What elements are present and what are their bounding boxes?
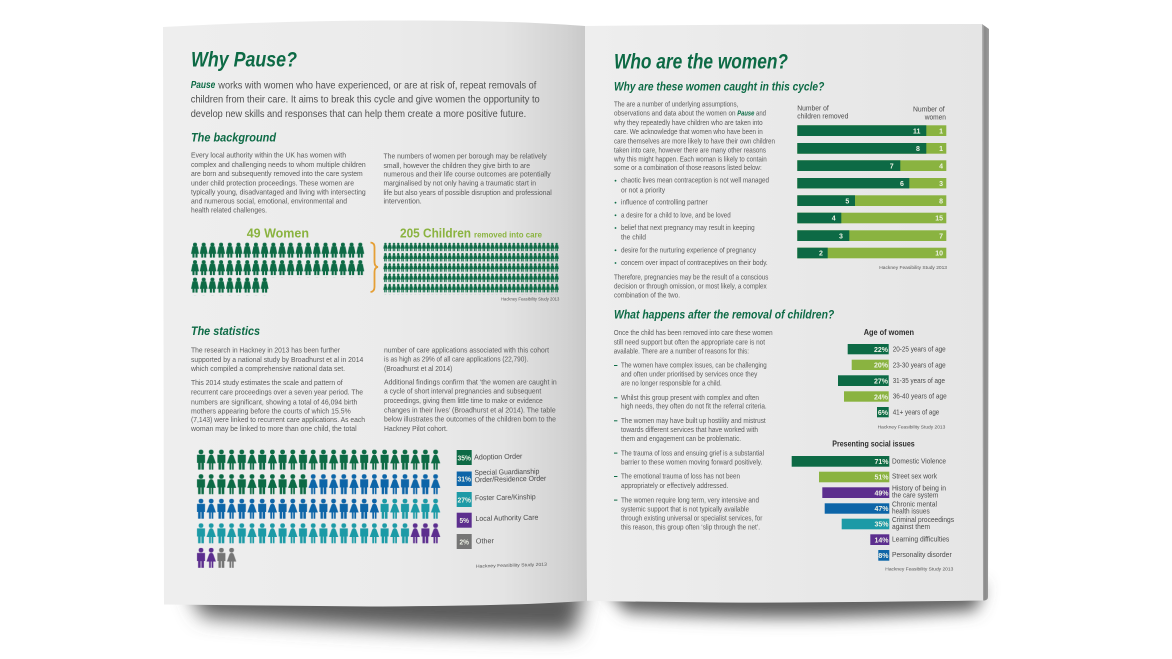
bar chart: presenting social issues: Learning difficulties <box>892 535 950 544</box>
bullet list: reasons: the child <box>621 234 646 241</box>
pictogram: 49 women <box>191 243 365 295</box>
label: 205 Children removed into care: 205 Children <box>400 225 471 240</box>
label: 49 Women: 49 Women <box>247 225 309 240</box>
dash list: reasons for lack of care: this reason, this group often ‘slip through the net’. <box>621 525 760 532</box>
intro paragraph: children from their care. It aims to break this cycle and give women the opportunity to <box>191 95 540 106</box>
text block: background left column: complex and challenging needs to whom multiple children <box>191 162 366 169</box>
bar chart: children removed vs number of women: 11 <box>913 128 921 135</box>
bar chart: age of women: 31-35 years of age <box>893 376 945 385</box>
bullet list: reasons: concern over impact of contraceptives on their body. <box>621 260 768 267</box>
text block: statistics left column: recurrent care proceedings over a seven year period. The <box>191 390 363 397</box>
bar chart: age of women: 36-40 years of age <box>893 392 947 401</box>
panel: left page <box>163 20 587 606</box>
bullet list: reasons: or not a priority <box>621 187 666 194</box>
bar chart: children removed vs number of women: 7 <box>939 233 943 240</box>
bar chart: presenting social issues: 14% <box>874 537 889 544</box>
bar chart: children removed vs number of women: 3 <box>839 233 843 240</box>
label: 205 Children removed into care <box>400 225 543 240</box>
text block: background right column: The numbers of women per borough may be relatively <box>384 154 547 161</box>
text block: background left column <box>191 153 366 215</box>
legend: outcomes: 27% <box>458 497 472 504</box>
text block: underlying assumptions: some or a combination of those reasons listed below: <box>614 165 762 172</box>
bar chart: age of women: 20% <box>874 363 889 370</box>
dash list: reasons for lack of care: The women require long term, very intensive and <box>621 497 759 504</box>
bar chart: children removed vs number of women: 1 <box>939 128 943 135</box>
heading: Age of women: Age of women <box>864 327 914 337</box>
text block: statistics right column: is as high as 29% of all care applications (22,790). <box>384 357 528 364</box>
bar chart: presenting social issues: 49% <box>874 490 889 497</box>
bar chart: children removed vs number of women: 7 <box>890 163 894 170</box>
dash list: reasons for lack of care: are no longer responsible for a child. <box>621 380 722 387</box>
dash list: reasons for lack of care: The women may have built up hostility and mistrust <box>621 418 766 425</box>
bar chart: presenting social issues: 35% <box>874 522 889 529</box>
bar chart: presenting social issues: Personality disorder <box>892 550 952 559</box>
intro paragraph: Pause <box>191 80 216 91</box>
text block: conclusion: combination of the two. <box>614 293 680 300</box>
legend: outcomes: Other <box>476 536 495 545</box>
text block: statistics left column: The research in Hackney in 2013 has been further <box>191 348 341 355</box>
dash list: reasons for lack of care: The women have complex issues, can be challenging <box>621 363 767 370</box>
bar chart: children removed vs number of women: 6 <box>900 181 904 188</box>
text block: underlying assumptions: observations and data about the women on <box>614 111 736 118</box>
bar chart: presenting social issues: History of being in <box>892 484 946 493</box>
text block: statistics left column: This 2014 study estimates the scale and pattern of <box>191 380 343 387</box>
heading: The statistics: The statistics <box>191 324 260 338</box>
text block: statistics right column: (Broadhurst et al 2014) <box>384 366 452 373</box>
left page content <box>190 48 560 569</box>
text block: background left column: Every local authority within the UK has women with <box>191 153 346 160</box>
heading: What happens after the removal of children?: What happens after the removal of children? <box>614 307 835 321</box>
bullet list: reasons: chaotic lives mean contraception is not well managed <box>621 178 769 185</box>
bar chart: children removed vs number of women: Number of <box>797 104 830 113</box>
bar chart: children removed vs number of women <box>797 104 946 258</box>
dash list: reasons for lack of care: barrier to these women moving forward positively. <box>621 459 762 466</box>
bar chart: children removed vs number of women: Number of <box>913 105 946 114</box>
text block: background left column: typically young, disadvantaged and living with intersecting <box>191 190 366 197</box>
right page content <box>613 50 954 572</box>
page drop shadows <box>188 585 984 634</box>
bar chart: children removed vs number of women: 10 <box>935 251 943 258</box>
bar chart: presenting social issues: Chronic mental <box>892 499 937 508</box>
text block: underlying assumptions: care. We acknowledge that women who have been in <box>614 129 763 136</box>
bar chart: age of women: 20-25 years of age <box>893 345 946 354</box>
bar chart: presenting social issues: health issues <box>892 506 930 515</box>
text block: underlying assumptions: and <box>756 111 766 118</box>
bar chart: children removed vs number of women: 8 <box>916 146 920 153</box>
bar chart: presenting social issues: 71% <box>874 459 889 466</box>
text block: conclusion <box>614 274 769 300</box>
text block: statistics right column: number of care applications associated with this cohort <box>384 347 549 354</box>
bar chart: age of women: 6% <box>878 410 889 417</box>
intro paragraph <box>191 80 540 120</box>
bar chart: children removed vs number of women: women <box>924 112 946 121</box>
bar chart: age of women <box>838 344 947 417</box>
bar chart: children removed vs number of women: 3 <box>939 181 943 188</box>
legend: outcomes: 31% <box>458 476 472 483</box>
text block: statistics left column: (7,143) were linked to recurrent care applications. As each <box>191 417 365 424</box>
legend: outcomes <box>457 450 548 549</box>
bar chart: children removed vs number of women: 15 <box>935 216 943 223</box>
text block: background right column: marginalised by not only having a traumatic start in <box>384 181 536 188</box>
icon: orange bracket <box>370 242 378 292</box>
intro paragraph: works with women who have experienced, or are at risk of, repeat removals of <box>217 80 537 91</box>
text block: statistics right column <box>384 347 557 433</box>
dash list: reasons for lack of care: The trauma of loss and ensuing grief is a substantial <box>621 450 764 457</box>
text block: underlying assumptions: why they repeatedly have children who are taken into <box>613 120 763 127</box>
bar chart: presenting social issues: against them <box>892 522 930 531</box>
text block: statistics right column: Additional findings confirm that ‘the women are caught in <box>384 379 557 386</box>
text block: background right column: intervention. <box>384 199 422 206</box>
legend: outcomes: 35% <box>458 455 472 462</box>
bar chart: presenting social issues: Domestic Violence <box>892 456 946 465</box>
text block: statistics right column: proceedings, giving them little time to make or evidence <box>384 398 543 405</box>
legend: outcomes: Local Authority Care <box>475 513 538 523</box>
bar chart: presenting social issues: the care system <box>892 491 938 500</box>
dash list: reasons for lack of care <box>614 363 767 532</box>
bullet list: reasons: desire for the nurturing experience of pregnancy <box>621 247 756 254</box>
bar chart: presenting social issues: 8% <box>878 553 889 560</box>
text block: statistics left column: numbers are significant, showing a total of 46,094 birth <box>191 399 357 406</box>
bar chart: children removed vs number of women: 8 <box>939 198 943 205</box>
bar chart: age of women: 24% <box>874 394 889 401</box>
text block: removal intro: available. There are a number of reasons for this: <box>614 348 749 355</box>
text block: underlying assumptions: why this might happen. Each woman is likely to contain <box>613 156 767 163</box>
text block: underlying assumptions: The are a number of underlying assumptions, <box>614 102 738 109</box>
title: Why Pause?: Why Pause? <box>191 48 297 72</box>
text block: statistics left column <box>190 348 365 433</box>
text block: statistics right column: Hackney Pilot cohort. <box>384 426 448 433</box>
dash list: reasons for lack of care: Whilst this group present with complex and often <box>621 395 759 402</box>
bar chart: children removed vs number of women: 4 <box>939 163 943 170</box>
label: 205 Children removed into care: removed into care <box>474 230 543 239</box>
bar chart: presenting social issues: 51% <box>874 475 889 482</box>
text block: background right column: life but also years of possible disruption and professional <box>384 190 552 197</box>
bar chart: children removed vs number of women: 2 <box>819 251 823 258</box>
legend: outcomes: 2% <box>460 539 470 546</box>
legend: outcomes: Foster Care/Kinship <box>475 492 536 502</box>
text block: removal intro: Once the child has been removed into care these women <box>614 330 773 337</box>
source note: Hackney Feasibility Study 2013 <box>885 567 954 572</box>
text block: background right column <box>384 154 552 206</box>
pictogram: outcomes for 100 children <box>196 450 441 569</box>
text block: conclusion: Therefore, pregnancies may be the result of a conscious <box>614 274 769 281</box>
text block: removal intro <box>614 330 773 355</box>
heading: Presenting social issues: Presenting social issues <box>832 439 915 449</box>
source note: Hackney Feasibility Study 2013 <box>501 297 560 302</box>
text block: statistics left column: which compiled a comprehensive national data set. <box>190 366 345 373</box>
source note: Hackney Feasibility Study 2013 <box>878 424 946 429</box>
text block: background right column: numerous and their life course outcomes are potentially <box>384 172 551 179</box>
dash list: reasons for lack of care: and often under prioritised by services once they <box>621 371 758 378</box>
bar chart: age of women: 41+ years of age <box>893 407 939 416</box>
pictogram: 205 children <box>383 243 559 294</box>
text block: background left column: and numerous social, emotional, environmental and <box>191 198 347 205</box>
text block: background right column: small, however the children they give birth to are <box>384 163 530 170</box>
legend: outcomes: Special Guardianship <box>474 467 540 477</box>
text block: background left column: health related challenges. <box>191 208 267 215</box>
heading: The background: The background <box>191 131 276 145</box>
text block: background left column: are born and subsequently removed into the care system <box>191 171 363 178</box>
bullet list: reasons: a desire for a child to love, and be loved <box>621 212 731 219</box>
dash list: reasons for lack of care: systemic support that is not typically available <box>621 507 749 514</box>
bar chart: presenting social issues: 47% <box>874 506 889 513</box>
text block: statistics left column: mothers appearing before the courts of which 15.5% <box>191 408 351 415</box>
bar chart: presenting social issues: Street sex work <box>892 472 937 481</box>
legend: outcomes: Order/Residence Order <box>474 474 547 484</box>
bar chart: children removed vs number of women: 5 <box>845 198 849 205</box>
bullet list: reasons: belief that next pregnancy may result in keeping <box>621 225 755 232</box>
source note: Hackney Feasibility Study 2013 <box>879 265 948 270</box>
text block: underlying assumptions: Pause <box>737 111 754 118</box>
legend: outcomes: 5% <box>460 518 470 525</box>
bullet list: reasons: influence of controlling partner <box>621 200 708 207</box>
bar chart: presenting social issues: Criminal proceedings <box>892 515 954 524</box>
dash list: reasons for lack of care: The emotional trauma of loss has not been <box>621 474 740 481</box>
bar chart: presenting social issues <box>792 456 954 561</box>
text block: statistics right column: below illustrates the outcomes of the children born to the <box>384 417 556 424</box>
bar chart: age of women: 22% <box>874 347 889 354</box>
bullet list: reasons <box>615 178 769 267</box>
legend: outcomes: Adoption Order <box>474 452 523 462</box>
text block: underlying assumptions: care themselves are more likely to have their own children <box>614 138 775 145</box>
dash list: reasons for lack of care: through existing universal or specialist services, for <box>621 515 763 522</box>
text block: background left column: under child protection proceedings. These women are <box>191 180 354 187</box>
source note: Hackney Feasibility Study 2013 <box>476 562 548 569</box>
dash list: reasons for lack of care: towards different services that have worked with <box>621 427 758 434</box>
bar chart: age of women: 23-30 years of age <box>893 360 946 369</box>
dash list: reasons for lack of care: high needs, they often do not fit the referral criteria. <box>621 404 767 411</box>
text block: underlying assumptions <box>613 102 775 172</box>
bar chart: age of women: 27% <box>874 378 889 386</box>
text block: underlying assumptions: taken into care, however there are many other reasons <box>614 147 766 154</box>
text block: conclusion: decision or through omission, or most likely, a complex <box>614 283 767 290</box>
dash list: reasons for lack of care: appropriately or effectively addressed. <box>621 483 728 490</box>
text block: statistics right column: changes in their lives’ (Broadhurst et al 2014). The table <box>384 407 556 414</box>
bar chart: children removed vs number of women: 4 <box>832 216 836 223</box>
text block: statistics right column: a cycle of short interval pregnancies and subsequent <box>384 388 541 395</box>
panel: right page <box>585 24 989 603</box>
bar chart: children removed vs number of women: 1 <box>939 146 943 153</box>
text block: statistics left column: woman may be linked to more than one child, the total <box>190 426 357 433</box>
intro paragraph: develop new skills and responses that can help them create a more positive future. <box>191 109 526 120</box>
title: Who are the women?: Who are the women? <box>614 50 788 73</box>
dash list: reasons for lack of care: them and engagement can be problematic. <box>621 436 741 443</box>
heading: Why are these women caught in this cycle?: Why are these women caught in this cycle? <box>614 80 825 94</box>
bar chart: children removed vs number of women: children removed <box>797 111 848 120</box>
text block: statistics left column: supported by a national study by Broadhurst et al in 2014 <box>191 357 363 364</box>
text block: removal intro: still need support but often the appropriate care is not <box>614 339 765 346</box>
